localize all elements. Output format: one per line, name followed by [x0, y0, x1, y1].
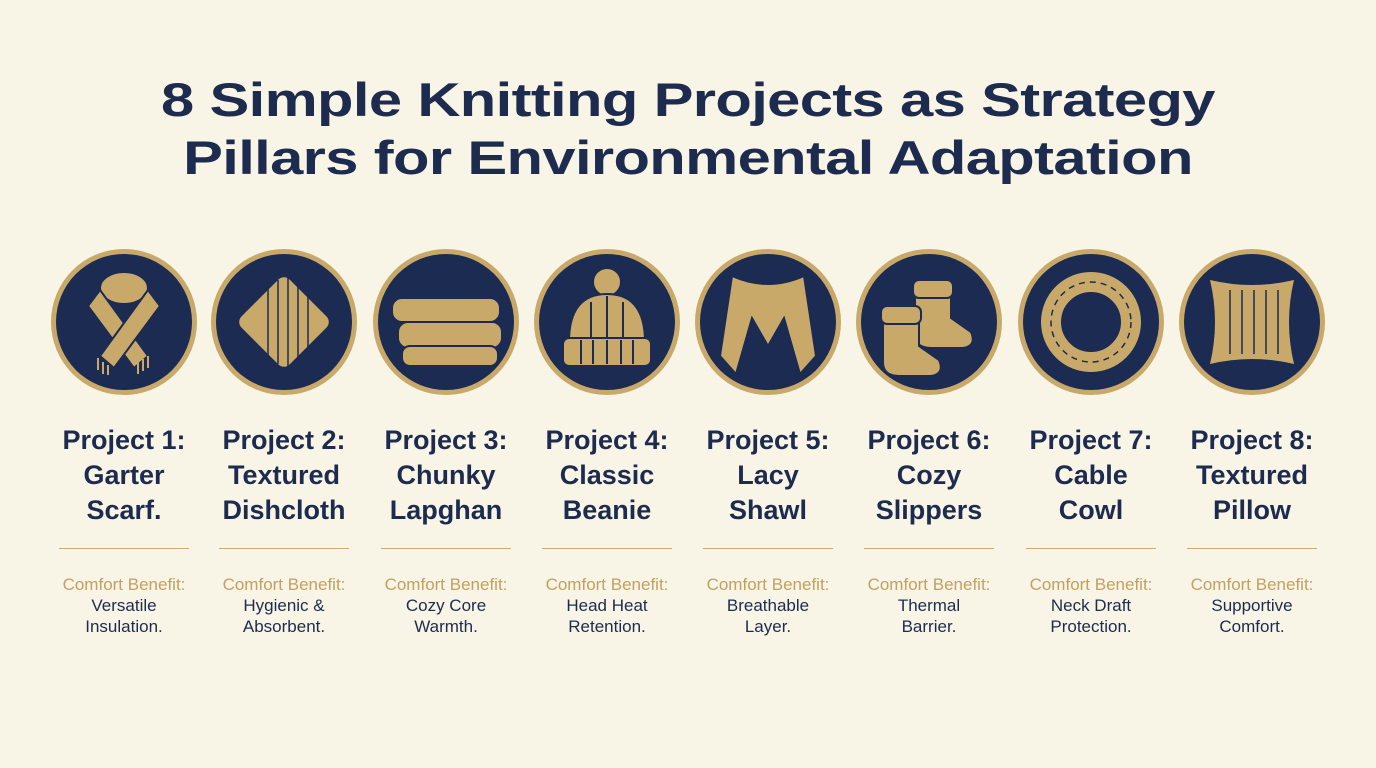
icon: lapghan	[373, 249, 519, 395]
column: project 4: Retention.	[568, 617, 646, 636]
column: project 7: Protection.	[1050, 617, 1132, 636]
column: project 2: Hygienic &	[243, 596, 325, 615]
column: project 8: Comfort.	[1219, 617, 1285, 636]
column: project 5: Layer.	[745, 617, 791, 636]
title: Pillars for Environmental Adaptation	[183, 131, 1193, 184]
title: 8 Simple Knitting Projects as Strategy	[161, 73, 1215, 126]
project name: Project 2:	[222, 425, 346, 455]
project name: Pillow	[1213, 495, 1291, 525]
project name: Project 6:	[867, 425, 991, 455]
column: project 8	[1179, 249, 1325, 636]
project name: Project 8:	[1190, 425, 1314, 455]
project name: Cable	[1054, 460, 1128, 490]
project name: Project 1:	[62, 425, 186, 455]
column: project 5: Breathable	[727, 596, 809, 615]
icon: pillow	[1179, 249, 1325, 395]
project name: Shawl	[729, 495, 807, 525]
project name: Project 7:	[1029, 425, 1153, 455]
project name: Beanie	[563, 495, 651, 525]
project name: Slippers	[876, 495, 982, 525]
project name	[1029, 425, 1153, 525]
icon: slippers	[856, 249, 1002, 395]
column: project 2: Absorbent.	[243, 617, 325, 636]
benefit: Comfort Benefit:	[223, 575, 345, 594]
project name	[545, 425, 669, 525]
project name: Lapghan	[390, 495, 502, 525]
icon: cowl	[1018, 249, 1164, 395]
benefit: Comfort Benefit:	[63, 575, 185, 594]
column: project 4	[534, 249, 680, 636]
icon: scarf	[51, 249, 197, 395]
project name: Cowl	[1059, 495, 1123, 525]
project name: Scarf.	[86, 495, 162, 525]
project name	[706, 425, 830, 525]
column: project 1	[51, 249, 197, 636]
project name: Project 4:	[545, 425, 669, 455]
benefit: Comfort Benefit:	[546, 575, 668, 594]
column: project 1: Versatile	[91, 596, 157, 615]
column: project 6: Barrier.	[902, 617, 956, 636]
column: project 7: Neck Draft	[1051, 596, 1131, 615]
benefit: Comfort Benefit:	[1030, 575, 1152, 594]
column: project 2	[211, 249, 357, 636]
project name: Textured	[1196, 460, 1308, 490]
project name	[222, 425, 346, 525]
column: project 8: Supportive	[1211, 596, 1293, 615]
project name: Chunky	[396, 460, 496, 490]
icon: dishcloth	[211, 249, 357, 395]
benefit: Comfort Benefit:	[868, 575, 990, 594]
column: project 7	[1018, 249, 1164, 636]
column: project 5	[695, 249, 841, 636]
column: project 6	[856, 249, 1002, 636]
title	[161, 73, 1216, 184]
column: project 1: Insulation.	[85, 617, 163, 636]
benefit: Comfort Benefit:	[385, 575, 507, 594]
project name	[867, 425, 991, 525]
column: project 3	[373, 249, 519, 636]
project name: Dishcloth	[222, 495, 346, 525]
project name	[62, 425, 186, 525]
project name: Garter	[83, 460, 165, 490]
column: project 3: Cozy Core	[406, 596, 486, 615]
icon: beanie	[534, 249, 680, 395]
project name: Lacy	[737, 460, 799, 490]
column: project 6: Thermal	[898, 596, 960, 615]
project name	[384, 425, 508, 525]
icon: shawl	[695, 249, 841, 395]
column: project 3: Warmth.	[414, 617, 478, 636]
benefit: Comfort Benefit:	[707, 575, 829, 594]
project name: Cozy	[897, 460, 961, 490]
project name	[1190, 425, 1314, 525]
benefit: Comfort Benefit:	[1191, 575, 1313, 594]
column: project 4: Head Heat	[566, 596, 648, 615]
project name: Project 5:	[706, 425, 830, 455]
project name: Classic	[560, 460, 654, 490]
project name: Project 3:	[384, 425, 508, 455]
project name: Textured	[228, 460, 340, 490]
